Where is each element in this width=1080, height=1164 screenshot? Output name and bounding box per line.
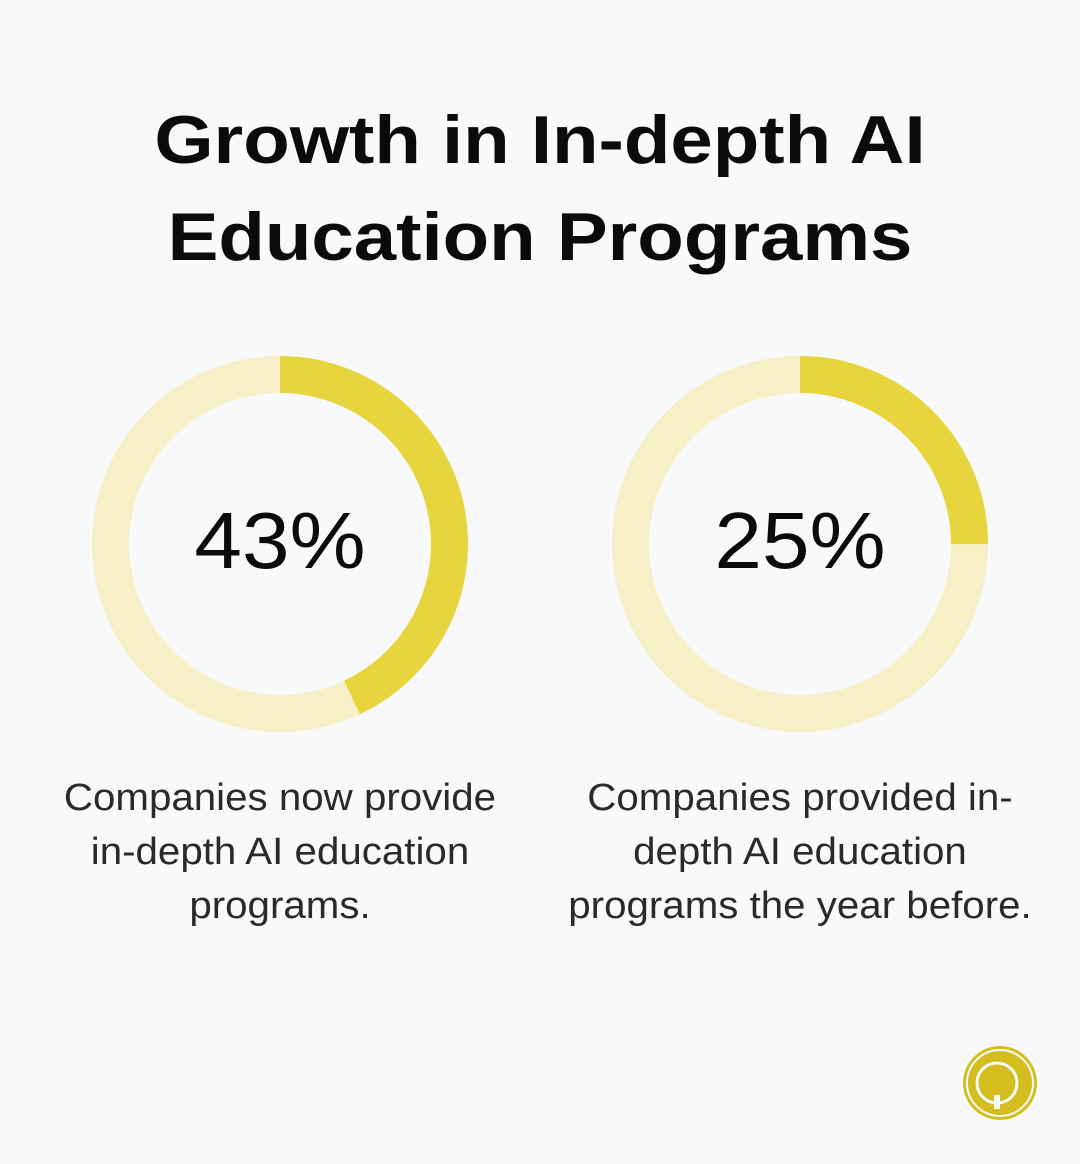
title: Growth in In-depth AI [154,102,926,178]
donut: 25%: 25% [714,496,886,585]
caption: 25%: depth AI education [633,831,967,873]
donut: 43% [110,374,450,714]
caption: 25%: programs the year before. [568,885,1032,927]
caption: 43%: in-depth AI education [91,831,469,873]
icon: logo [963,1046,1037,1120]
caption: 43% [64,777,496,927]
caption: 43%: programs. [189,885,371,927]
donut: 43%: 43% [194,496,366,585]
caption: 25% [568,777,1032,927]
caption: 25%: Companies provided in- [587,777,1013,819]
title: Education Programs [168,199,912,275]
title [154,102,926,275]
caption: 43%: Companies now provide [64,777,496,819]
donut: 25% [630,374,970,714]
